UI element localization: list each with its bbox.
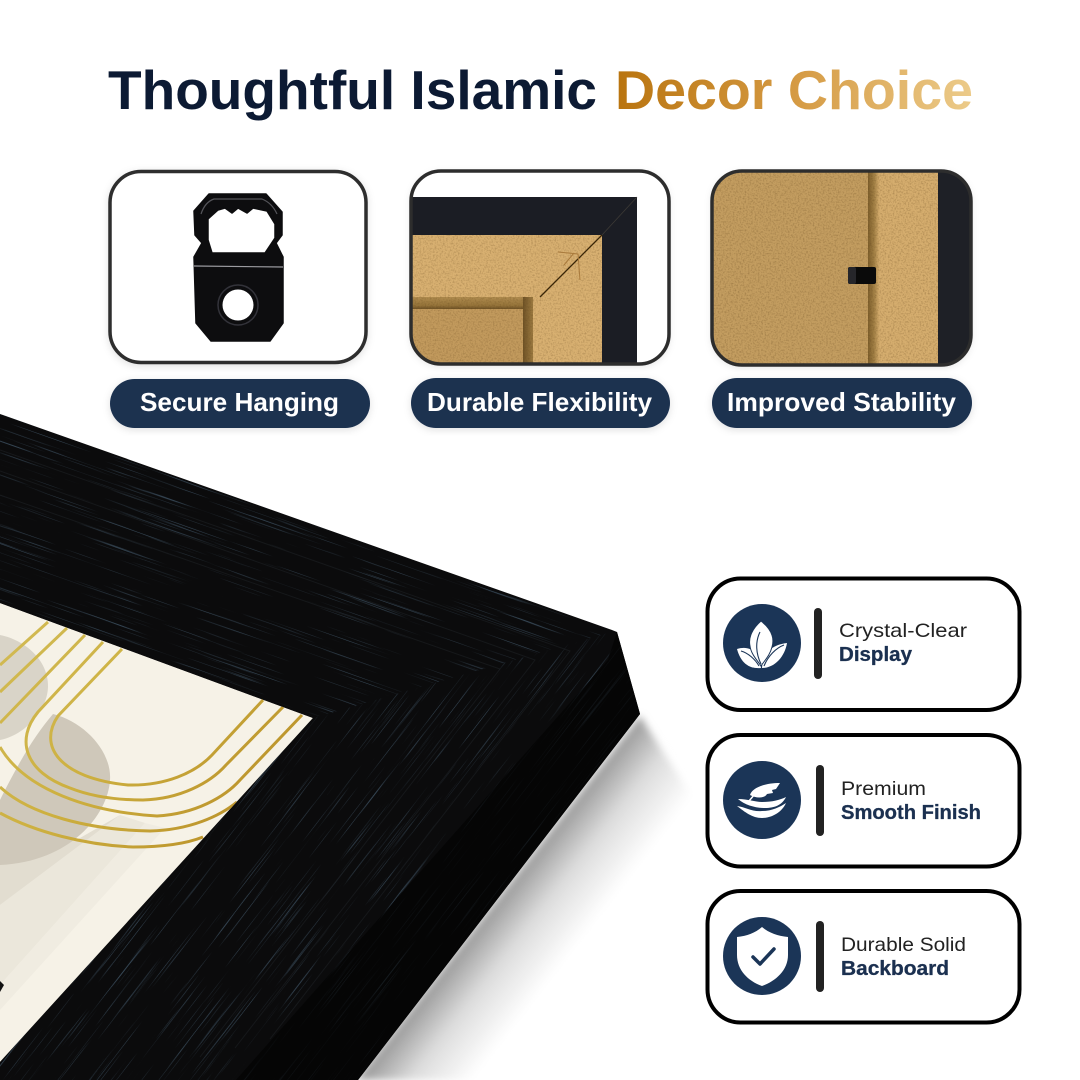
framed artwork bbox=[0, 603, 313, 1062]
card text bbox=[841, 934, 966, 980]
label pill: Secure Hanging: Secure Hanging bbox=[140, 387, 339, 417]
frame side face bbox=[236, 632, 640, 1080]
label pill: Durable Flexibility: Durable Flexibility bbox=[427, 387, 653, 417]
label pill: Improved Stability: Improved Stability bbox=[727, 387, 957, 417]
card text: Durable Solid bbox=[841, 934, 966, 956]
divider bar bbox=[814, 608, 822, 679]
card text: Premium bbox=[841, 778, 926, 800]
gold arch lines bbox=[0, 622, 302, 847]
frame cast shadow bbox=[356, 716, 698, 1080]
icon: shield with check bbox=[723, 917, 801, 995]
card text: Backboard bbox=[841, 958, 949, 980]
frame top rail grain bbox=[0, 414, 615, 718]
frame right rail grain bbox=[0, 631, 615, 1080]
card text: Crystal-Clear bbox=[839, 620, 968, 642]
image tile: backboard clip bbox=[712, 171, 972, 365]
card text: Smooth Finish bbox=[841, 802, 981, 824]
title bbox=[108, 59, 973, 121]
black wooden frame corner bbox=[0, 414, 640, 1080]
card: Durable Solid Backboard bbox=[708, 891, 1020, 1022]
card text: Display bbox=[839, 644, 913, 666]
label pill: Durable Flexibility bbox=[411, 378, 670, 428]
card: Premium Smooth Finish bbox=[708, 735, 1020, 866]
label pill: Improved Stability bbox=[712, 378, 972, 428]
card text bbox=[841, 778, 981, 824]
icon: sawtooth hanger bbox=[194, 194, 283, 341]
image tile: frame corner back bbox=[411, 171, 669, 364]
icon: leaves bbox=[723, 604, 801, 682]
card text bbox=[839, 620, 968, 666]
title: Thoughtful Islamic bbox=[108, 59, 597, 121]
divider bar bbox=[816, 921, 824, 992]
image tile: hanger hook bbox=[110, 172, 366, 362]
label pill: Secure Hanging bbox=[110, 379, 370, 428]
artwork lower stripes bbox=[0, 815, 144, 982]
card: Crystal-Clear Display bbox=[708, 578, 1020, 710]
icon: feather on fabric bbox=[723, 761, 801, 839]
panel: secure hanging bbox=[110, 172, 370, 428]
divider bar bbox=[816, 765, 824, 836]
panel: durable flexibility bbox=[411, 171, 670, 428]
artwork beige shapes bbox=[0, 635, 110, 865]
panel: improved stability bbox=[712, 171, 972, 428]
title: Decor Choice bbox=[615, 59, 973, 121]
